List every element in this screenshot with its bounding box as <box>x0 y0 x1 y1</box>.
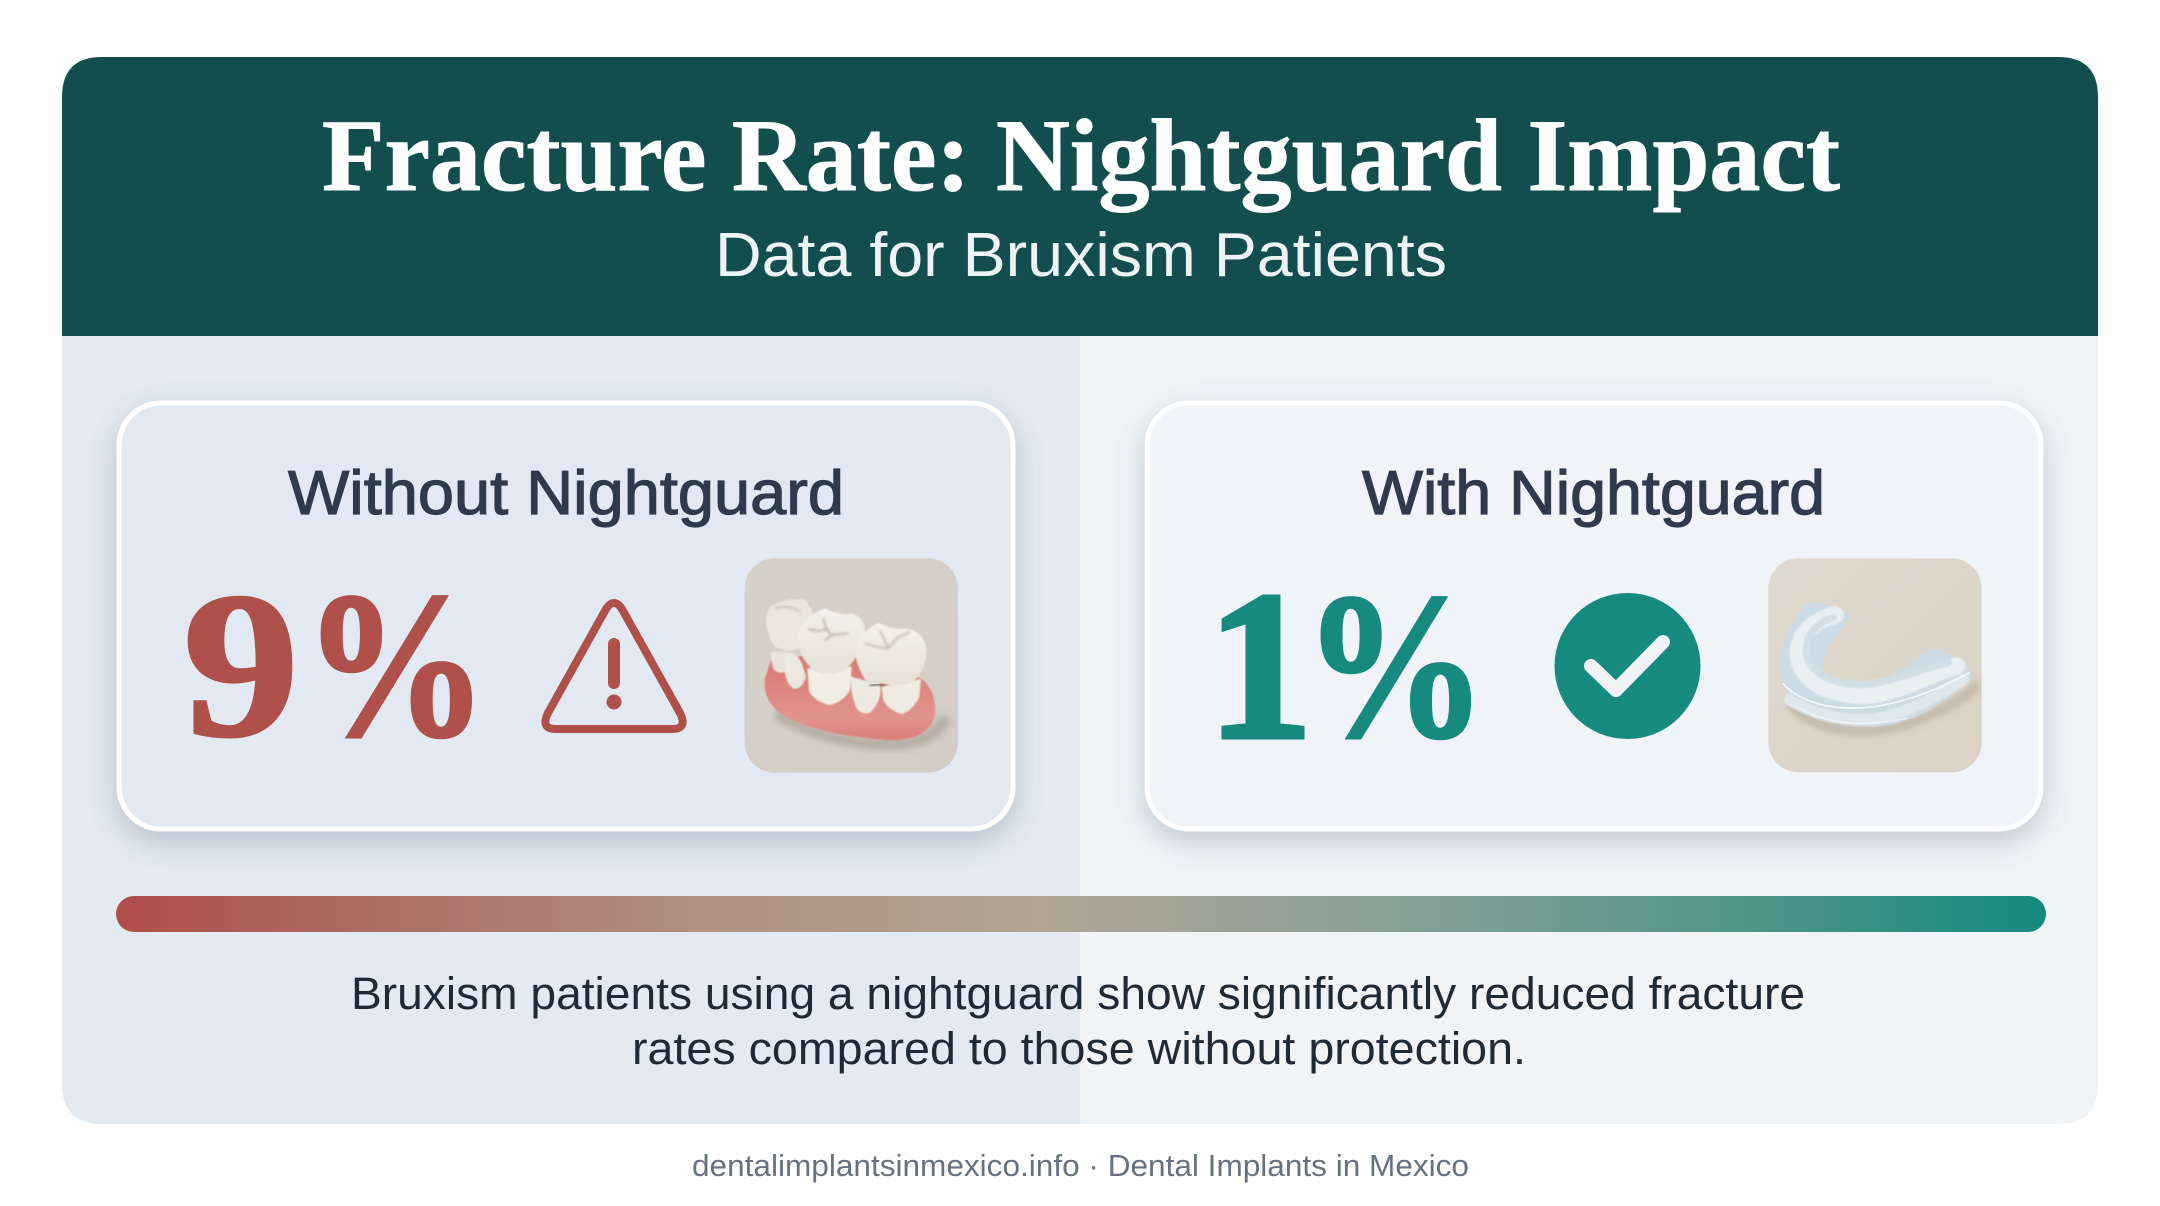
panel: main background <box>62 336 2098 1124</box>
image: clear nightguard <box>1768 558 1982 772</box>
icon: check circle <box>1554 593 1700 739</box>
gum <box>765 653 935 740</box>
image: fractured teeth on gum <box>745 558 958 773</box>
icon: warning triangle <box>545 603 683 729</box>
footer credit: dentalimplantsinmexico.info · Dental Implants in Mexico <box>692 1148 1469 1183</box>
heading: with nightguard: With Nightguard <box>1362 459 1825 528</box>
summary text: rates compared to those without protection. <box>632 1023 1526 1074</box>
subtitle: Data for Bruxism Patients <box>715 221 1447 290</box>
stat: 1 percent: % <box>1303 551 1487 781</box>
panel: without nightguard <box>119 403 1013 829</box>
stat: 1 percent <box>1207 548 1487 783</box>
gradient comparison bar <box>116 896 2046 932</box>
stat: 9 percent: 9 <box>183 550 299 780</box>
header banner <box>62 57 2098 336</box>
crowns <box>766 599 812 650</box>
lower teeth <box>771 652 787 673</box>
stat: 1 percent: 1 <box>1207 548 1313 783</box>
stat: 9 percent: % <box>303 550 488 780</box>
summary text: Bruxism patients using a nightguard show significantly reduced fracture <box>351 968 1805 1019</box>
summary text <box>351 968 1805 1074</box>
title: Fracture Rate: Nightguard Impact <box>322 99 1840 213</box>
panel: with nightguard <box>1147 403 2041 829</box>
stat: 9 percent <box>183 550 488 780</box>
heading: without nightguard: Without Nightguard <box>288 459 844 528</box>
